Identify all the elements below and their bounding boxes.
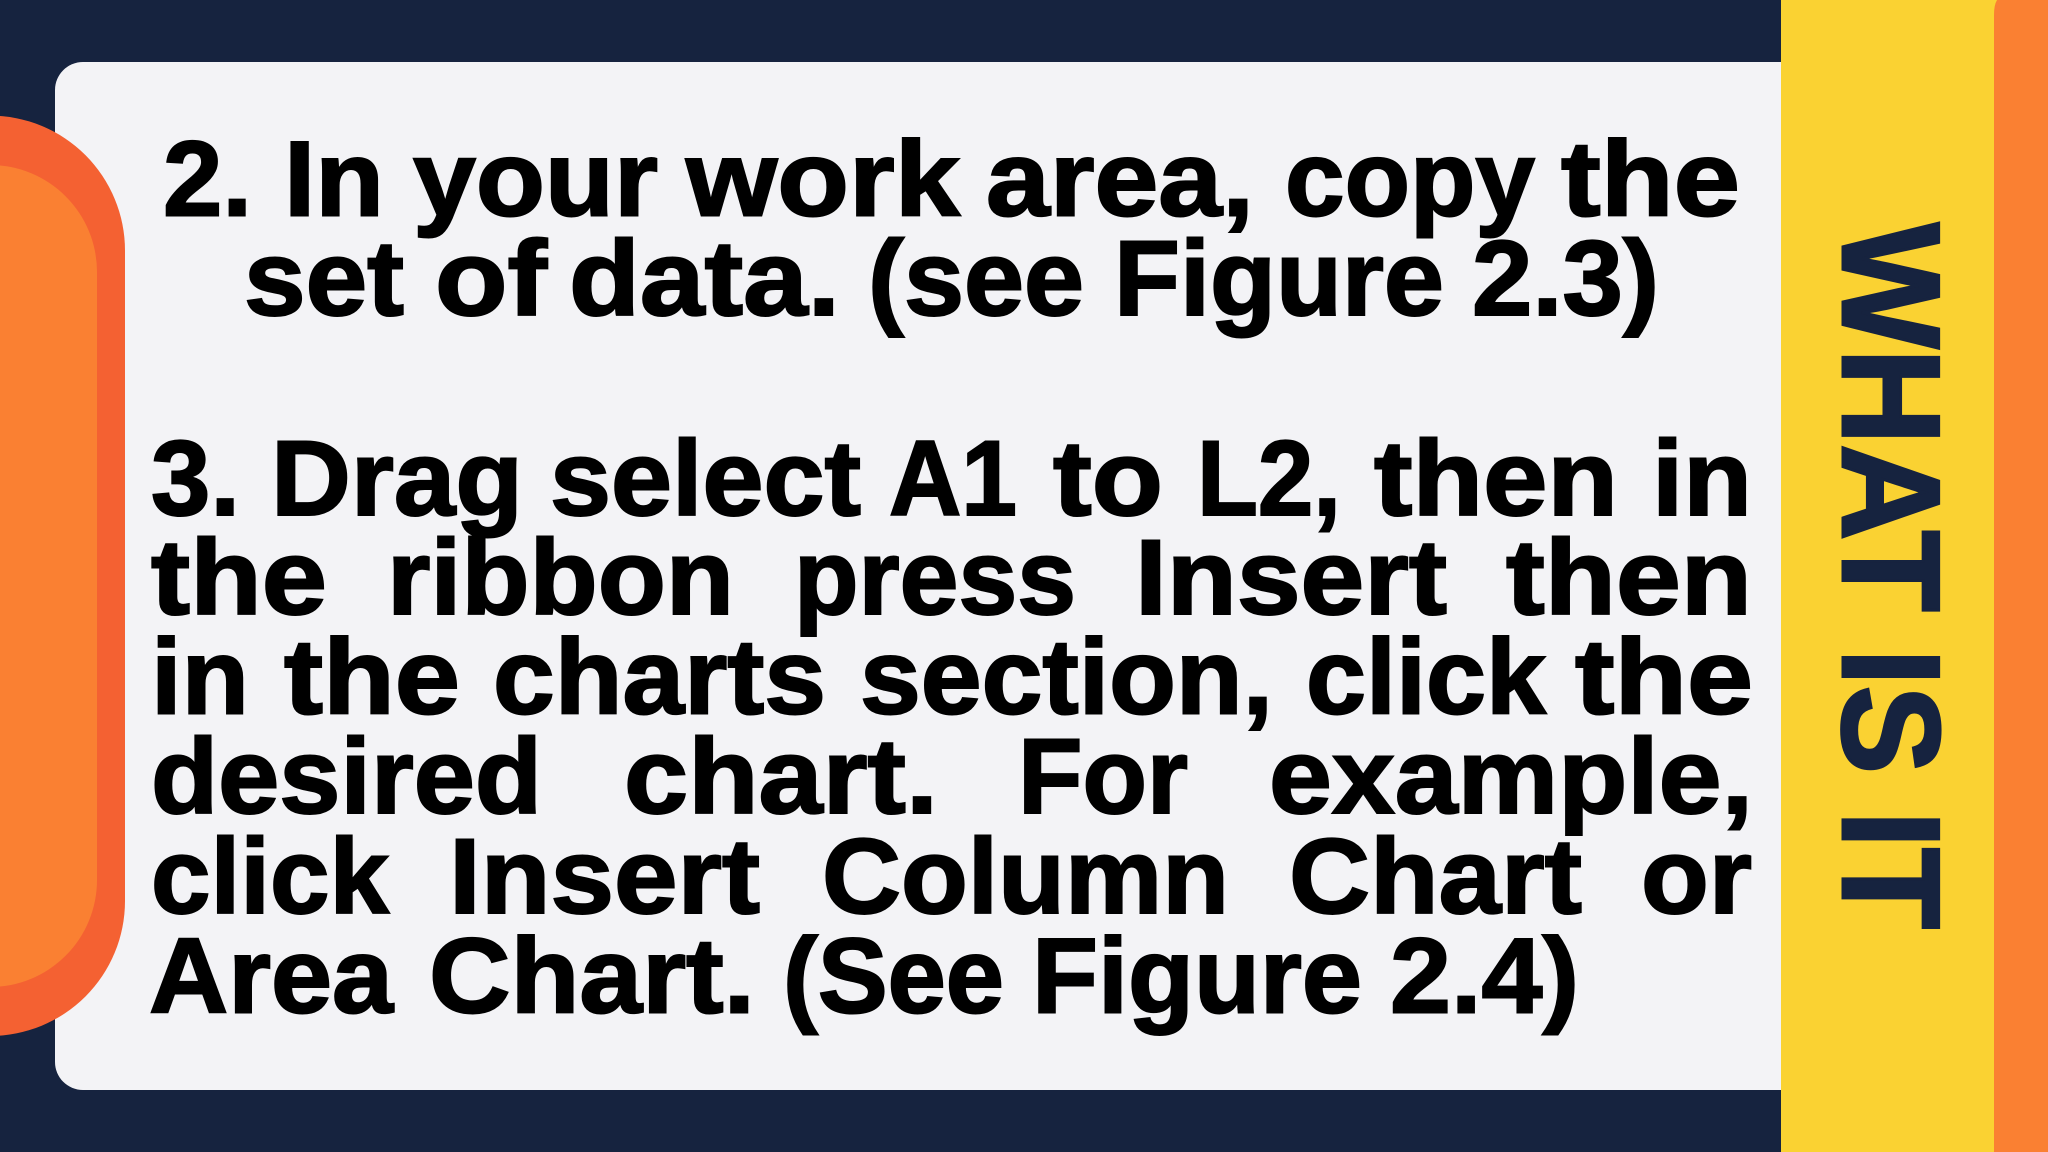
text block: step 3: the [284,617,460,737]
text block: step 3: desired [151,716,542,836]
text block: step 3: 2.4) [1390,916,1579,1036]
text block: step 3: Area [149,916,394,1036]
text block: step 3: Figure [1032,916,1362,1036]
text block: step 2: your [413,118,658,238]
text block: step 3: charts [493,617,826,737]
text block: step 3: chart. [624,716,938,836]
vertical heading: WHAT IS IT: WHAT IS IT [1813,223,1968,929]
text block: step 3: in [1652,418,1752,538]
text block: step 3: (See [783,916,1004,1036]
text block: step 3: or [1641,816,1752,936]
text block: step 3: 3. [151,418,240,538]
text block: step 2 [163,118,1740,338]
text block: step 3: the [1575,617,1753,737]
text block: step 2: of [435,218,548,338]
text block: step 3: For [1018,716,1188,836]
text block: step 3: example, [1269,716,1753,836]
text block: step 3: to [1053,418,1163,538]
text block: step 3: Chart [1289,816,1582,936]
text block: step 2: area, [986,118,1254,238]
panel: white content card [55,62,1825,1090]
text block: step 2: Figure [1114,218,1444,338]
text block: step 3: click [1306,617,1547,737]
text block: step 2: 2. [163,118,252,238]
text block: step 2: 2.3) [1472,218,1659,338]
text block: step 2: the [1561,118,1740,238]
text block: step 3: then [1506,517,1752,637]
text block: step 3: Insert [449,816,760,936]
text block: step 2: set [244,218,404,338]
text block: step 2: work [685,118,961,238]
text block: step 3: Column [822,816,1229,936]
text block: step 3 [149,418,1753,1036]
text block: step 3: Drag [271,418,523,538]
text block: step 3: in [151,617,249,737]
text block: step 3: Chart. [429,916,755,1036]
right orange edge strip [1994,0,2048,1152]
text block: step 3: A1 [889,418,1017,538]
text block: step 2: (see [868,218,1084,338]
text block: step 3: section, [860,617,1273,737]
text block: step 2: data. [569,218,840,338]
text block: step 2: copy [1285,118,1535,238]
text block: step 3: click [151,816,390,936]
text block: step 3: L2, [1197,418,1341,538]
text block: step 2: In [284,118,384,238]
text block: step 3: press [794,517,1076,637]
left orange rounded tab [0,116,125,1036]
text block: step 3: then [1374,418,1618,538]
text block: step 3: Insert [1135,517,1447,637]
text block: step 3: the [151,517,327,637]
text block: step 3: ribbon [387,517,734,637]
text block: step 3: select [550,418,861,538]
right yellow sidebar [1781,0,2003,1152]
